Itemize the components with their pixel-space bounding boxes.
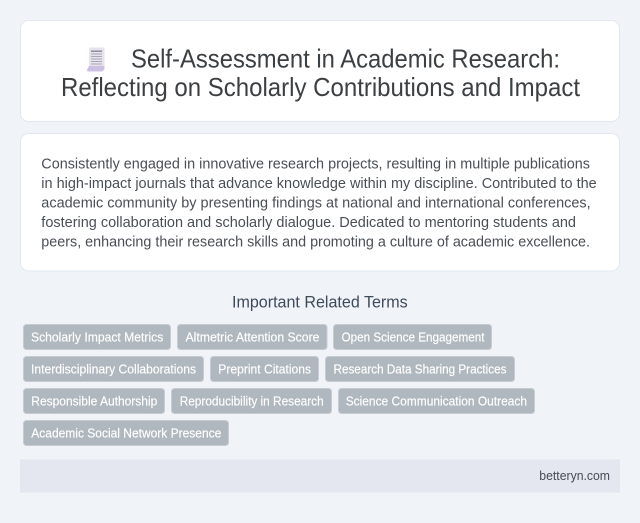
tag list — [24, 324, 534, 446]
tag — [326, 356, 514, 382]
icon: paper scroll — [87, 48, 104, 72]
tag: Preprint Citations — [218, 362, 311, 376]
tag — [24, 324, 170, 350]
text block: self-assessment summary: peers, enhancing their research skills and promoting a culture of academic excellence. — [41, 233, 590, 250]
tag — [178, 324, 327, 350]
tag — [172, 388, 332, 414]
title: Reflecting on Scholarly Contributions and Impact — [61, 74, 580, 102]
tag: Science Communication Outreach — [346, 394, 527, 408]
tag — [210, 356, 318, 382]
panel: summary paragraph — [20, 134, 620, 271]
tag — [338, 388, 534, 414]
panel: title card — [20, 20, 620, 122]
tag: Reproducibility in Research — [180, 394, 324, 408]
text block: self-assessment summary: fostering collaboration and scholarly dialogue. Dedicated to mentoring students and — [41, 214, 576, 231]
tag: Altmetric Attention Score — [186, 330, 320, 344]
tag — [24, 420, 228, 446]
tag — [334, 324, 492, 350]
text block: self-assessment summary — [41, 155, 597, 250]
heading: related terms: Important Related Terms — [232, 292, 408, 312]
tag: Open Science Engagement — [342, 330, 485, 344]
tag — [24, 356, 204, 382]
footer credit: betteryn.com — [539, 469, 610, 483]
text block: self-assessment summary: Consistently engaged in innovative research projects, resulting in multiple publications — [41, 155, 590, 172]
tag — [24, 388, 164, 414]
tag: Responsible Authorship — [31, 394, 157, 408]
tag: Scholarly Impact Metrics — [31, 330, 163, 344]
title — [61, 46, 580, 102]
title: Self-Assessment in Academic Research: — [131, 46, 560, 74]
text block: self-assessment summary: in high-impact journals that advance knowledge within my discipline. Contributed to the — [41, 175, 597, 192]
footer bar — [20, 459, 620, 493]
text block: self-assessment summary: academic community by presenting findings at national and international conferences, — [41, 194, 591, 211]
tag: Academic Social Network Presence — [31, 426, 221, 440]
tag: Research Data Sharing Practices — [334, 362, 506, 376]
tag: Interdisciplinary Collaborations — [31, 362, 196, 376]
